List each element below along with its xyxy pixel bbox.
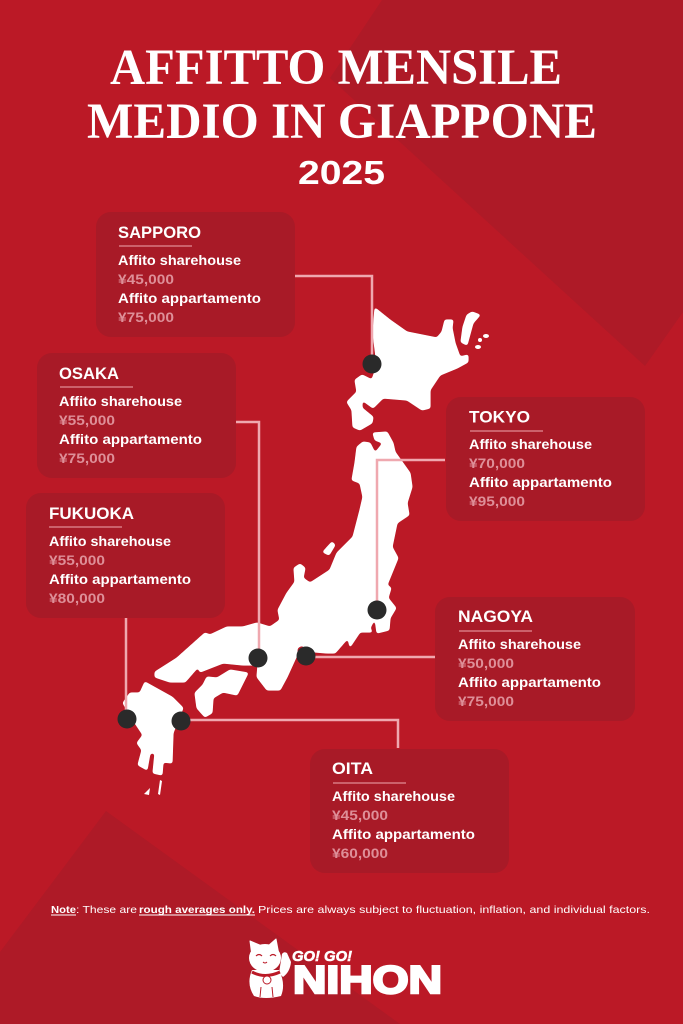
panel: Nagoya: Affito sharehouse <box>458 636 581 652</box>
note: Note <box>51 904 76 916</box>
connector lines <box>126 276 445 748</box>
panel: Nagoya <box>435 597 635 721</box>
panel: Oita: OITA <box>332 759 373 778</box>
panel: Sapporo: SAPPORO <box>118 223 201 242</box>
panel: Fukuoka <box>26 493 225 618</box>
panel: Tokyo: ¥95,000 <box>469 493 525 509</box>
panel: Oita: ¥45,000 <box>332 807 388 823</box>
panel: Fukuoka: FUKUOKA <box>49 504 134 523</box>
panel: Nagoya: NAGOYA <box>458 607 533 626</box>
panel: Sapporo: ¥75,000 <box>118 309 174 325</box>
city markers <box>118 354 386 730</box>
panel: Tokyo: ¥70,000 <box>469 455 525 471</box>
panel: Oita: Affito sharehouse <box>332 788 455 804</box>
panel: Oita: Affito appartamento <box>332 826 475 842</box>
panel: Sapporo <box>96 212 295 337</box>
year: 2025 <box>298 154 385 191</box>
panel: Osaka: OSAKA <box>59 364 119 383</box>
panel: Tokyo: Affito sharehouse <box>469 436 592 452</box>
panel: Sapporo: Affito sharehouse <box>118 252 241 268</box>
panel: Fukuoka: Affito appartamento <box>49 571 191 587</box>
title <box>87 40 597 150</box>
panel: Fukuoka: Affito sharehouse <box>49 533 171 549</box>
logo wordmark <box>292 948 442 1002</box>
panel: Osaka: ¥55,000 <box>59 412 115 428</box>
panel: Oita <box>310 749 509 873</box>
panel: Oita: ¥60,000 <box>332 845 388 861</box>
panel: Nagoya: ¥75,000 <box>458 693 514 709</box>
panel: Osaka: Affito appartamento <box>59 431 202 447</box>
panel: Fukuoka: ¥55,000 <box>49 552 105 568</box>
icon: lucky cat <box>249 939 291 998</box>
panel: Osaka <box>37 353 236 478</box>
map of Japan <box>123 308 489 795</box>
title: AFFITTO MENSILE <box>110 40 562 96</box>
panel: Nagoya: Affito appartamento <box>458 674 601 690</box>
note <box>51 904 650 916</box>
logo wordmark: NIHON <box>293 959 442 1002</box>
logo <box>249 939 442 1002</box>
note: rough averages only. <box>139 904 255 916</box>
panel: Tokyo: TOKYO <box>469 408 530 426</box>
panel: Tokyo <box>446 397 645 521</box>
panel: Osaka: ¥75,000 <box>59 450 115 466</box>
title: MEDIO IN GIAPPONE <box>87 94 597 150</box>
panel: Fukuoka: ¥80,000 <box>49 590 105 606</box>
note: Prices are always subject to fluctuation, inflation, and individual factors. <box>258 904 650 916</box>
logo wordmark: GO! GO! <box>292 948 352 965</box>
panel: Osaka: Affito sharehouse <box>59 393 182 409</box>
panel: Nagoya: ¥50,000 <box>458 655 514 671</box>
panel: Sapporo: ¥45,000 <box>118 271 174 287</box>
panel: Sapporo: Affito appartamento <box>118 290 261 306</box>
note: : These are <box>76 904 137 916</box>
panel: Tokyo: Affito appartamento <box>469 474 612 490</box>
